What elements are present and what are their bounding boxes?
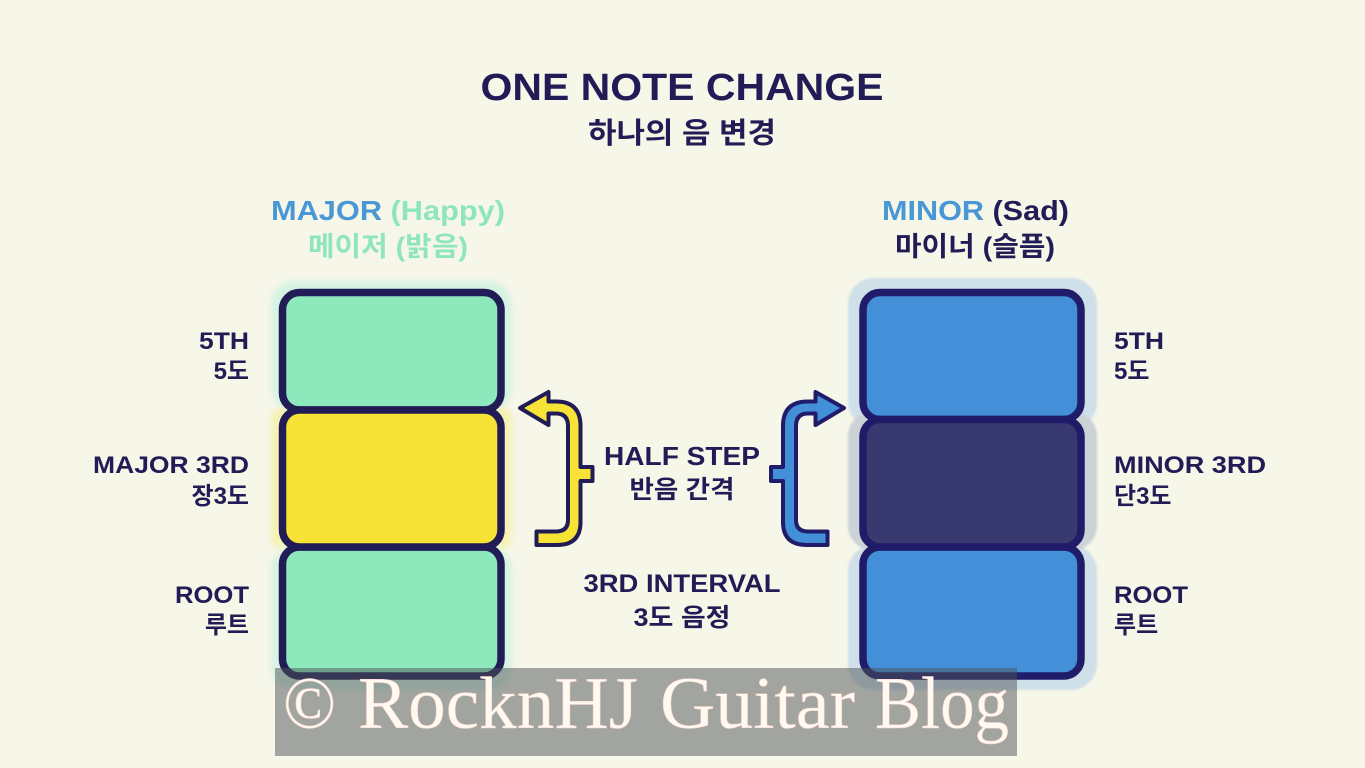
- labels: minor side: MINOR 3RD: [1114, 452, 1266, 479]
- labels: minor side: 단3도: [1114, 483, 1172, 510]
- minor block: 5th: [863, 292, 1081, 420]
- heading: minor: 마이너 (슬픔): [895, 232, 1055, 262]
- label: 3rd interval: 3도 음정: [634, 604, 730, 632]
- labels: minor side: [1114, 328, 1266, 639]
- heading: major: 메이저 (밝음): [308, 232, 468, 262]
- label: half step: 반음 간격: [630, 476, 734, 504]
- label: 3rd interval: [584, 570, 780, 632]
- title: [480, 67, 884, 150]
- title: 하나의 음 변경: [588, 117, 776, 150]
- major glow: [271, 281, 512, 690]
- watermark: [275, 663, 1017, 756]
- labels: major side: MAJOR 3RD: [93, 452, 249, 479]
- major block: root: [282, 547, 501, 676]
- minor glow: [848, 278, 1097, 690]
- watermark: Guitar: [660, 663, 855, 745]
- label: half step: [604, 441, 760, 504]
- title: ONE NOTE CHANGE: [480, 67, 884, 109]
- arrow: minor half step: [771, 392, 844, 545]
- labels: major side: 5도: [214, 358, 249, 385]
- heading: minor: MINOR (Sad): [882, 195, 1069, 226]
- watermark: RocknHJ: [358, 663, 638, 745]
- watermark: ©: [283, 663, 336, 745]
- labels: major side: 장3도: [191, 483, 249, 510]
- heading: major: [271, 195, 505, 262]
- label: half step: HALF STEP: [604, 441, 760, 471]
- labels: major side: 루트: [205, 612, 249, 639]
- labels: major side: [93, 328, 249, 639]
- watermark: Blog: [875, 663, 1009, 745]
- heading: major: MAJOR (Happy): [271, 195, 505, 226]
- major block: 5th: [282, 292, 501, 410]
- minor block: root: [863, 547, 1081, 676]
- labels: minor side: 5TH: [1114, 328, 1164, 355]
- label: 3rd interval: 3RD INTERVAL: [584, 570, 780, 598]
- labels: major side: ROOT: [175, 582, 249, 609]
- major chord stack: [271, 281, 512, 690]
- arrow: major half step: [520, 392, 592, 545]
- labels: minor side: 5도: [1114, 358, 1149, 385]
- major block: major 3rd: [282, 410, 501, 547]
- labels: major side: 5TH: [199, 328, 249, 355]
- labels: minor side: 루트: [1114, 612, 1158, 639]
- labels: minor side: ROOT: [1114, 582, 1188, 609]
- heading: minor: [882, 195, 1069, 262]
- minor block: minor 3rd: [863, 420, 1081, 547]
- minor chord stack: [848, 278, 1097, 690]
